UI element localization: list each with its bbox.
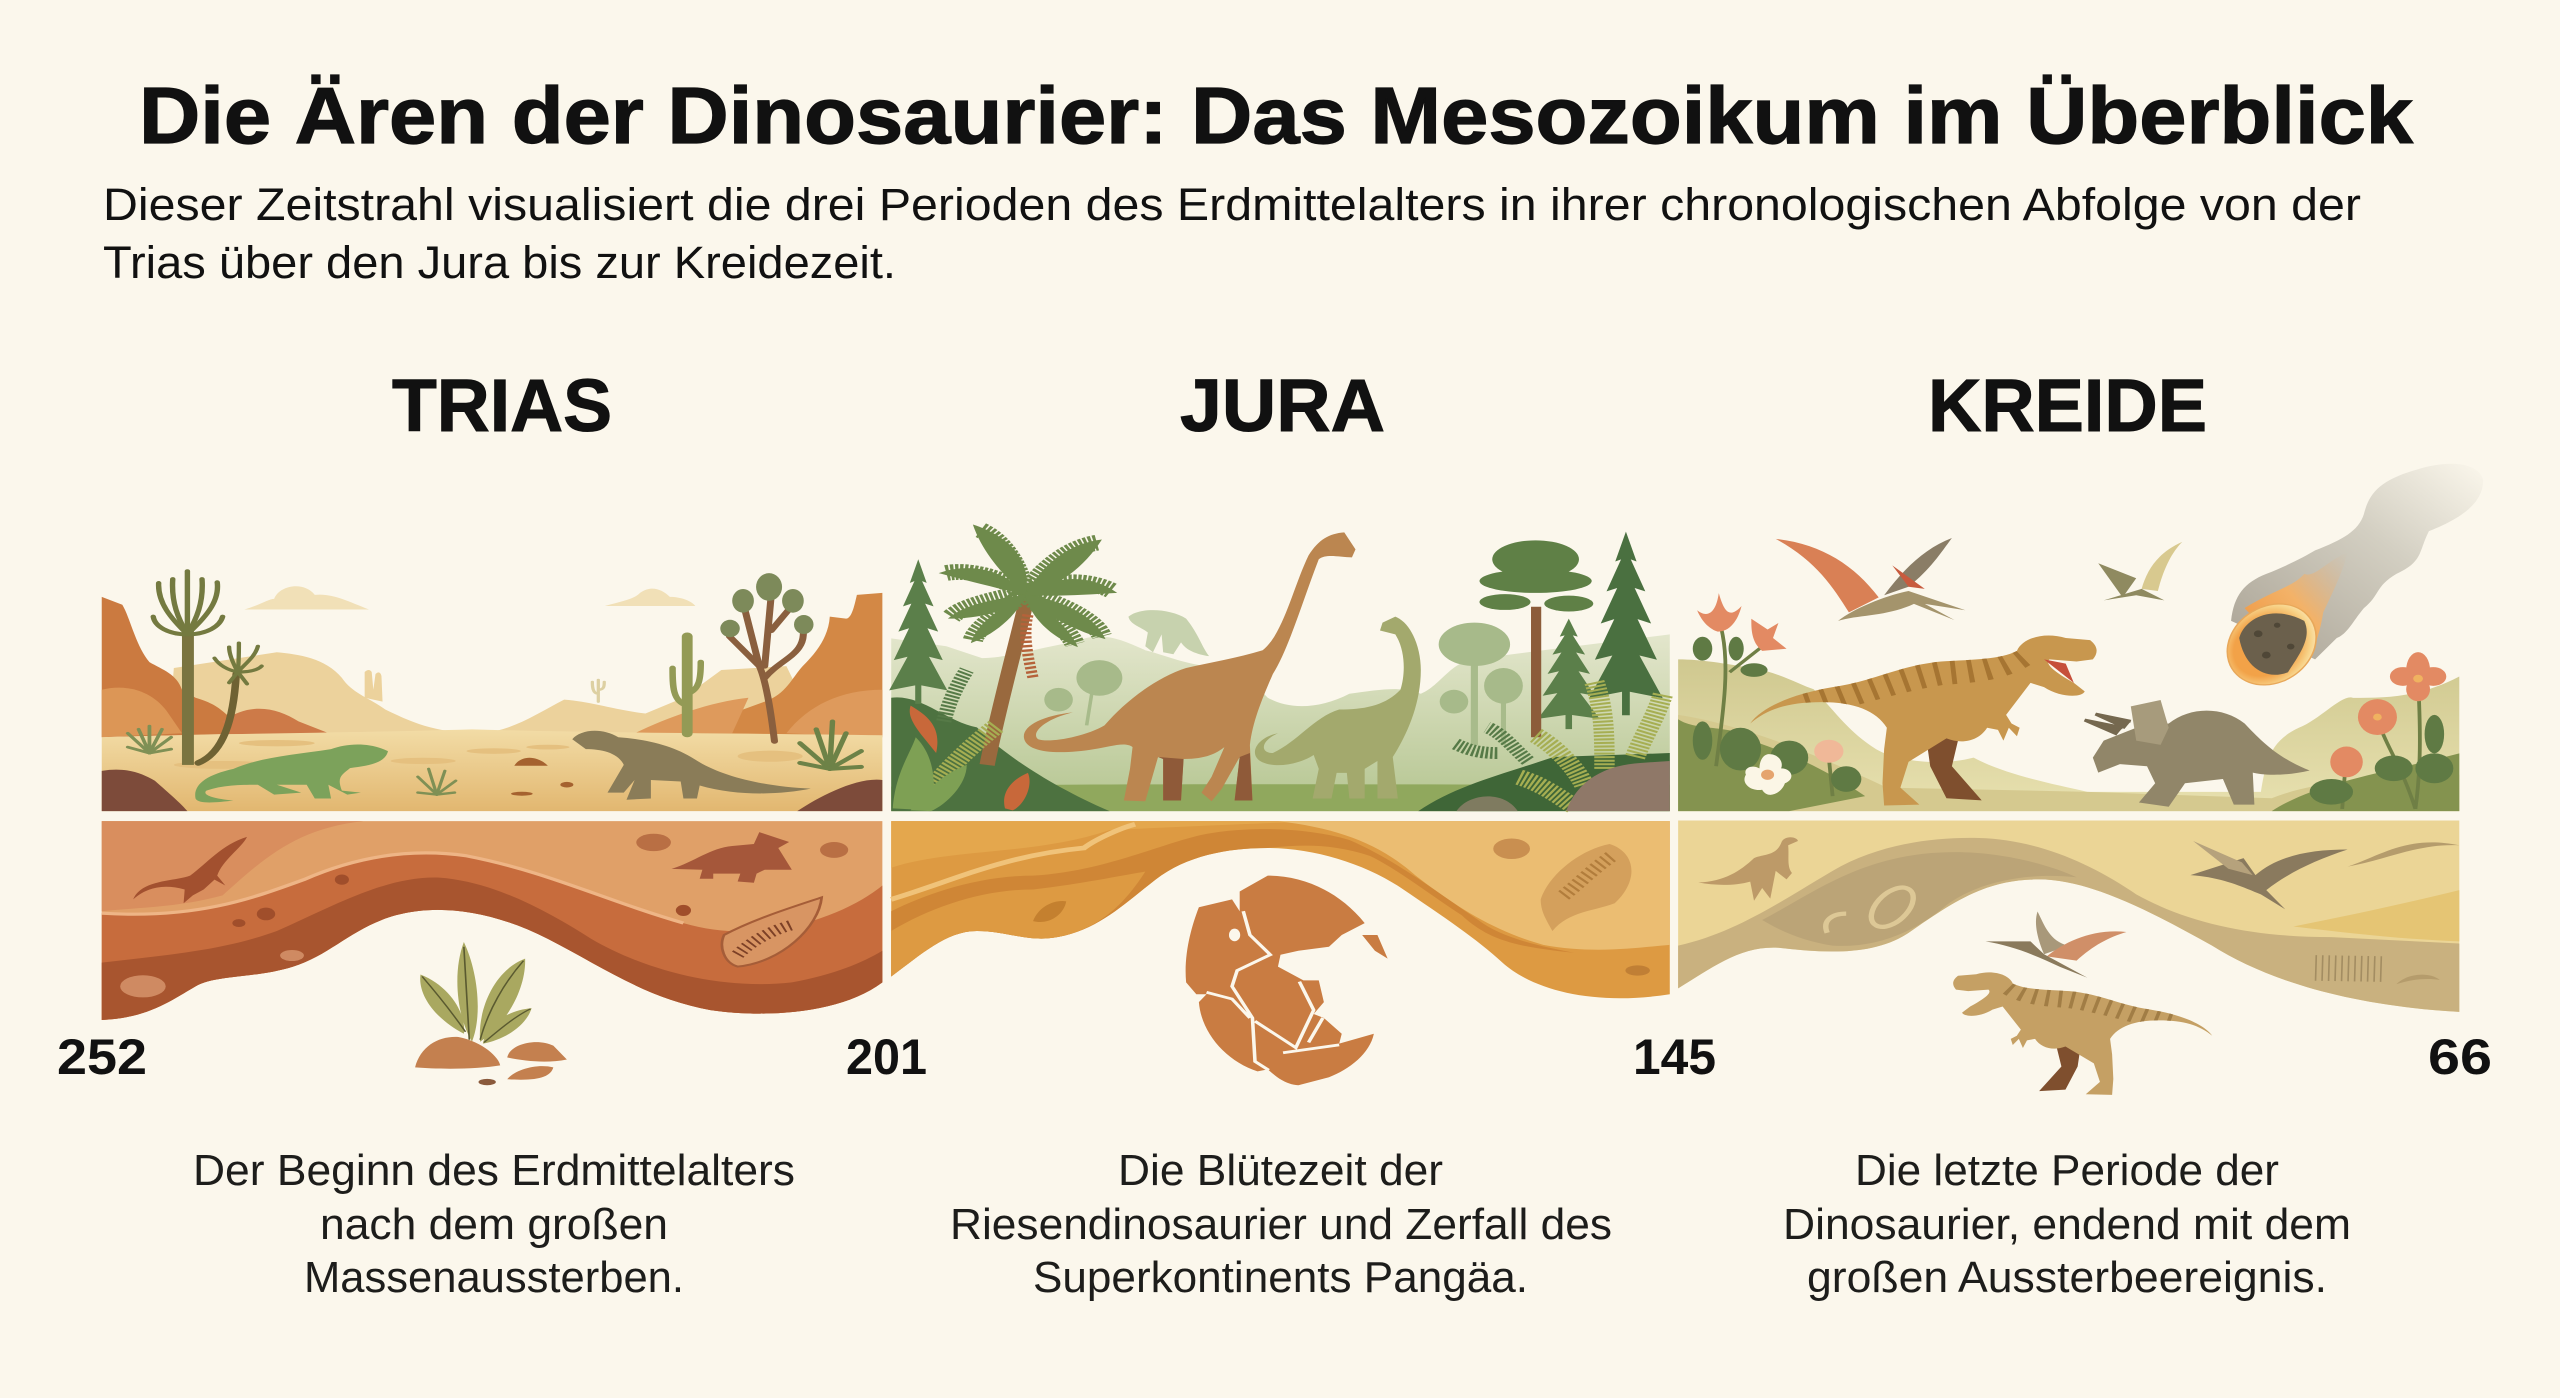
icon: long-neck fossil: [133, 837, 247, 903]
icon: meteor: [2211, 464, 2483, 696]
intro text: [103, 179, 2361, 288]
timeline labels: 66: [2428, 1029, 2492, 1085]
icon: Tyrannosaurus: [1750, 635, 2097, 806]
icon: horned fossil: [671, 832, 792, 883]
description: Trias: Massenaussterben.: [304, 1253, 684, 1302]
description: Jura: Superkontinents Pangäa.: [1033, 1253, 1528, 1302]
icon: Triceratops: [2085, 700, 2310, 807]
timeline labels: [57, 1029, 2492, 1085]
icon: conifers: [889, 532, 1663, 729]
description: Jura: [950, 1146, 1612, 1302]
icon: palm tree: [939, 525, 1117, 765]
panel: Trias scene: [102, 571, 882, 811]
icon: tall palm-like tree: [128, 571, 262, 765]
heading: Kreide: KREIDE: [1928, 364, 2207, 447]
panel: Jura strata: [891, 821, 1670, 998]
description: Trias: [193, 1146, 795, 1302]
heading: Jura: JURA: [1180, 364, 1385, 447]
icon: grey reptile: [572, 731, 811, 800]
icon: T-rex below Kreide: [1953, 972, 2212, 1095]
icon: small dinosaur fossil: [1698, 837, 1798, 901]
icon: ferns: [931, 670, 1663, 806]
title: Die Ären der Dinosaurier: Das Mesozoikum im Überblick: [139, 71, 2414, 160]
icon: joshua tree and cactus: [418, 573, 861, 795]
panel: Kreide strata: [1678, 820, 2459, 1012]
icon: small green sauropod: [1255, 617, 1421, 799]
icon: egg fossil: [1826, 882, 1922, 933]
description: Trias: nach dem großen: [320, 1200, 668, 1249]
heading: Trias: TRIAS: [392, 364, 612, 447]
description: Trias: Der Beginn des Erdmittelalters: [193, 1146, 795, 1195]
panel: Kreide scene: [1678, 464, 2483, 811]
description: Jura: Riesendinosaurier und Zerfall des: [950, 1200, 1612, 1249]
panel: Trias strata: [102, 821, 882, 1020]
icon: flowers: [1693, 593, 2453, 809]
description: Kreide: Dinosaurier, endend mit dem: [1783, 1200, 2351, 1249]
description: Kreide: Die letzte Periode der: [1855, 1146, 2279, 1195]
icon: plant with rocks: [415, 942, 567, 1085]
icon: Pangaea globe: [1186, 876, 1388, 1085]
panel: Jura scene: [889, 525, 1670, 811]
icon: rocks: [1566, 761, 1670, 811]
description: Kreide: großen Aussterbeereignis.: [1807, 1253, 2327, 1302]
timeline labels: 145: [1633, 1029, 1716, 1085]
description: Jura: Die Blütezeit der: [1118, 1146, 1443, 1195]
icon: green reptile: [195, 744, 388, 802]
icon: pterosaur fossil: [2190, 841, 2348, 909]
timeline labels: 201: [846, 1029, 927, 1085]
description: Kreide: [1783, 1146, 2351, 1302]
icon: trilobite fossil: [722, 897, 822, 967]
icon: distant sauropod: [1128, 610, 1209, 656]
icon: ammonite-like fossil: [1541, 844, 1631, 931]
timeline labels: 252: [57, 1029, 147, 1085]
intro text: Trias über den Jura bis zur Kreidezeit.: [103, 237, 896, 288]
icon: clouds: [244, 586, 695, 610]
icon: araucaria tree: [1479, 540, 1593, 737]
icon: pterosaur: [1776, 538, 1965, 621]
icon: small pterosaur: [2098, 542, 2182, 600]
icon: pterosaur below Kreide: [1986, 911, 2126, 978]
intro text: Dieser Zeitstrahl visualisiert die drei Perioden des Erdmittelalters in ihrer chronologischen Abfolge von der: [103, 179, 2361, 230]
icon: large brown sauropod: [1024, 532, 1356, 801]
